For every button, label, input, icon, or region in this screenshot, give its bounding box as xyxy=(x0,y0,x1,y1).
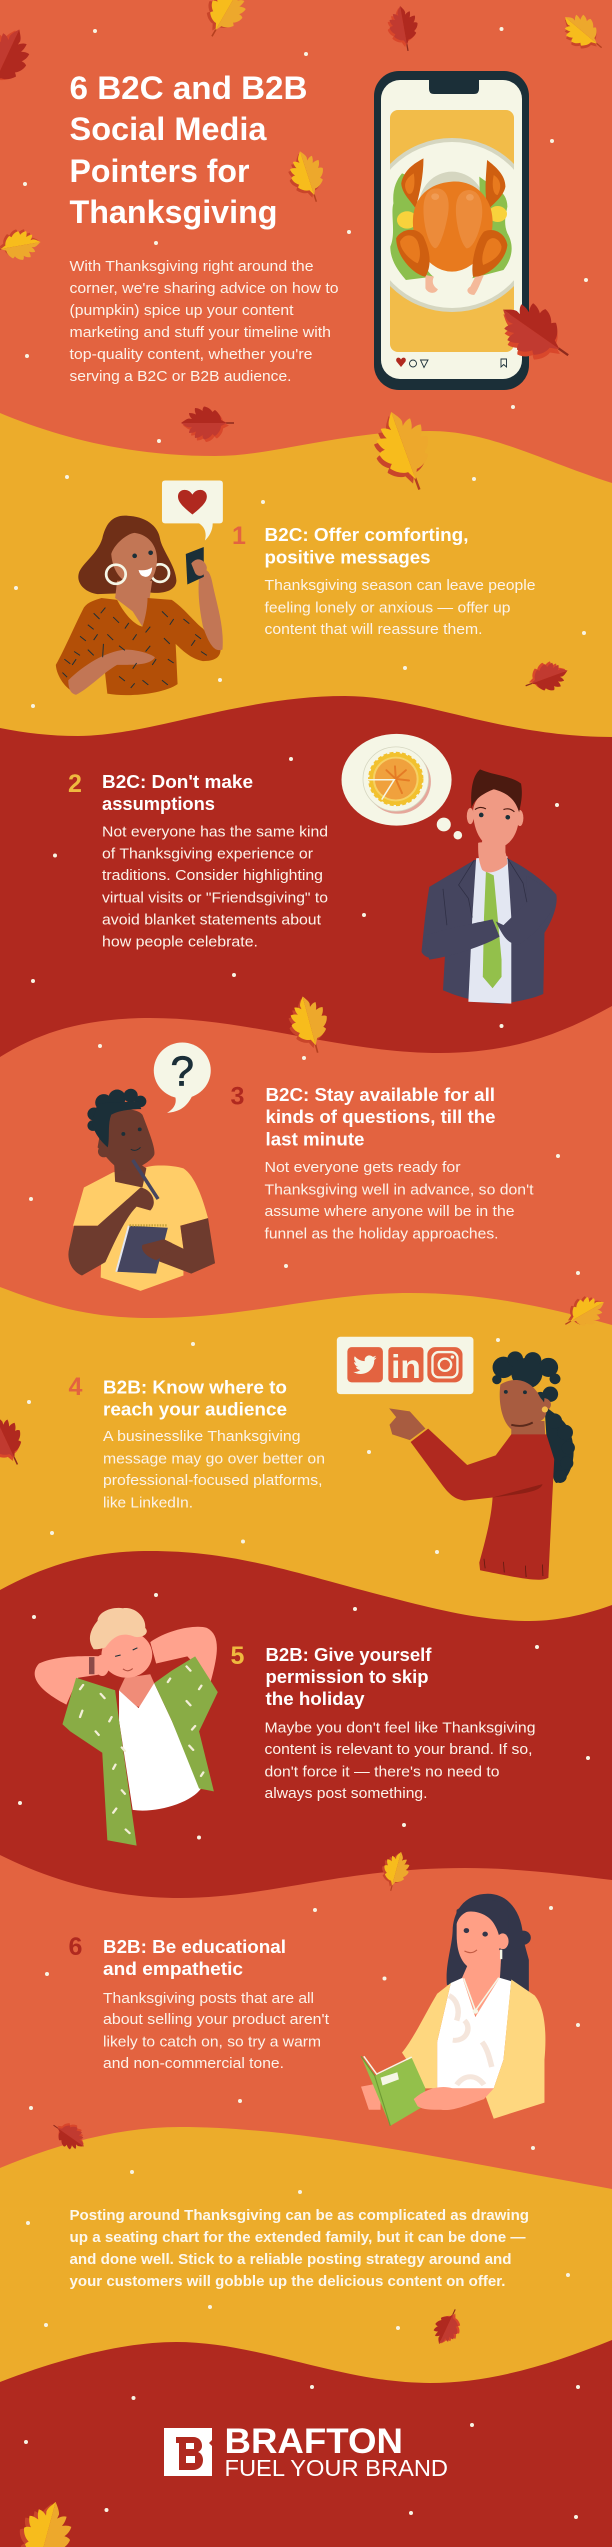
intro text: corner, we're sharing advice on how to xyxy=(70,280,338,297)
tip 4 heading: reach your audience xyxy=(103,1400,287,1420)
tip 3 heading: kinds of questions, till the xyxy=(266,1107,496,1127)
illustration: man thinking about pie xyxy=(342,734,557,1004)
illustration: man with notepad xyxy=(68,1042,215,1291)
title: 6 B2C and B2B xyxy=(70,70,308,106)
icon: leaf in closing panel xyxy=(428,2304,468,2350)
tip 2 body: virtual visits or "Friendsgiving" to xyxy=(102,890,328,907)
tip 4 body xyxy=(103,1428,325,1512)
icon: leaf at seventh wave xyxy=(47,2114,92,2156)
icon: linkedin: in xyxy=(391,1348,421,1386)
closing text: your customers will gobble up the delicious content on offer. xyxy=(70,2273,506,2290)
icon: leaf at sixth wave xyxy=(377,1848,413,1894)
tip 2 number: 2 xyxy=(68,770,82,798)
tip 4 body: A businesslike Thanksgiving xyxy=(103,1428,300,1445)
intro text xyxy=(70,258,338,385)
closing text xyxy=(70,2207,529,2290)
logo: Brafton xyxy=(164,2422,448,2481)
closing text: up a seating chart for the extended family, but it can be done — xyxy=(70,2229,526,2246)
tip 6 number: 6 xyxy=(68,1933,82,1961)
tip 5 number: 5 xyxy=(230,1642,244,1670)
icon: logo mark xyxy=(164,2428,212,2476)
icon: leaf right of tip 1 xyxy=(520,656,572,699)
tip 2 body: avoid blanket statements about xyxy=(102,911,322,928)
tip 1 body: feeling lonely or anxious — offer up xyxy=(264,600,510,616)
panel: tip 5 wave xyxy=(0,1551,612,2547)
icon: leaf left of tip 4 xyxy=(0,1409,32,1472)
tip 3 heading: B2C: Stay available for all xyxy=(266,1085,495,1105)
title xyxy=(70,70,308,230)
icon: leaf left edge xyxy=(0,226,43,264)
tip 5 heading: permission to skip xyxy=(266,1667,428,1687)
icon: leaf bottom left xyxy=(10,2495,79,2547)
illustration: relaxed man in green shirt xyxy=(35,1608,218,1846)
icon: leaf at fourth wave xyxy=(557,1288,611,1336)
tip 4 body: like LinkedIn. xyxy=(103,1494,193,1512)
tip 6 heading xyxy=(103,1937,286,1979)
tip 4 number: 4 xyxy=(68,1373,82,1401)
tip 2 heading: B2C: Don't make xyxy=(102,772,253,792)
speech bubble with heart xyxy=(162,480,223,541)
tip 3 number: 3 xyxy=(230,1082,244,1110)
logo: Brafton: FUEL YOUR BRAND xyxy=(224,2455,448,2481)
icon: leaf beside title xyxy=(282,146,332,208)
tip 2 heading xyxy=(102,772,253,814)
intro text: With Thanksgiving right around the xyxy=(70,258,314,275)
intro text: top-quality content, whether you're xyxy=(70,346,312,363)
tip 4 body: message may go over better on xyxy=(103,1450,325,1467)
tip 5 body xyxy=(264,1720,536,1802)
panel: tip 6 wave xyxy=(0,1855,612,2547)
tip 1 heading: positive messages xyxy=(264,548,430,568)
intro text: serving a B2C or B2B audience. xyxy=(70,368,292,385)
panel: tip 3 wave xyxy=(0,1006,612,2547)
tip 5 heading xyxy=(266,1645,433,1709)
tip 5 body: don't force it — there's no need to xyxy=(264,1763,500,1780)
phone illustration with turkey xyxy=(374,71,529,390)
tip 3 heading xyxy=(266,1085,496,1149)
tip 3 body: assume where anyone will be in the xyxy=(264,1203,514,1220)
illustration: woman pointing at social icons xyxy=(337,1337,575,1580)
closing text: and done well. Stick to a reliable posting strategy around and xyxy=(70,2251,512,2268)
intro text: marketing and stuff your timeline with xyxy=(70,324,331,341)
tip 5 body: always post something. xyxy=(264,1785,428,1802)
tip 5 heading: the holiday xyxy=(266,1689,364,1709)
tip 5 body: Maybe you don't feel like Thanksgiving xyxy=(264,1720,536,1736)
panel: closing wave xyxy=(0,2127,612,2547)
logo: Brafton: BRAFTON xyxy=(224,2422,403,2461)
tip 1 body xyxy=(264,577,536,638)
tip 1 heading xyxy=(264,525,468,568)
speech bubble with question mark: ? xyxy=(171,1048,194,1095)
tip 3 body: funnel as the holiday approaches. xyxy=(264,1225,498,1242)
thought bubble with pie xyxy=(342,734,462,839)
book xyxy=(361,2056,425,2126)
tip 2 body: of Thanksgiving experience or xyxy=(102,846,313,862)
illustration: woman with phone xyxy=(56,480,223,695)
tip 3 body xyxy=(264,1159,534,1242)
icon: leaf top middle right xyxy=(384,4,422,54)
tip 2 body: traditions. Consider highlighting xyxy=(102,867,323,884)
social media card xyxy=(337,1337,473,1394)
tip 2 body xyxy=(102,823,328,951)
icon: leaf top right xyxy=(554,6,611,61)
panel: tip 2 wave xyxy=(0,696,612,2547)
tip 5 body: content is relevant to your brand. If so, xyxy=(264,1741,532,1758)
closing text: Posting around Thanksgiving can be as complicated as drawing xyxy=(70,2207,529,2224)
tip 3 body: Not everyone gets ready for xyxy=(264,1159,460,1176)
tip 1 number: 1 xyxy=(232,522,246,550)
tip 1 body: Thanksgiving season can leave people xyxy=(264,577,536,594)
title: Social Media xyxy=(70,111,267,147)
icon: leaf top centre xyxy=(195,0,254,45)
icon: twitter xyxy=(347,1347,383,1382)
panel: footer wave xyxy=(0,2340,612,2547)
tip 6 body: and non-commercial tone. xyxy=(103,2055,284,2072)
illustration: woman reading book xyxy=(361,1894,545,2126)
tip 5 heading: B2B: Give yourself xyxy=(266,1645,433,1665)
tip 6 heading: B2B: Be educational xyxy=(103,1937,286,1957)
icon: leaf over phone xyxy=(487,289,582,379)
speech bubble with question mark xyxy=(154,1042,211,1113)
panel: tip 4 wave xyxy=(0,1287,612,2547)
title: Pointers for xyxy=(70,153,250,189)
tip 1 heading: B2C: Offer comforting, xyxy=(264,525,468,545)
intro text: (pumpkin) spice up your content xyxy=(70,302,294,319)
tip 6 heading: and empathetic xyxy=(103,1959,243,1979)
tip 4 heading xyxy=(103,1377,287,1420)
tip 3 body: Thanksgiving well in advance, so don't xyxy=(264,1181,534,1198)
title: Thanksgiving xyxy=(70,194,278,230)
icon: leaf at first wave xyxy=(181,406,234,442)
tip 6 body: Thanksgiving posts that are all xyxy=(103,1990,314,2007)
tip 6 body: likely to catch on, so try a warm xyxy=(103,2033,321,2050)
tip 2 heading: assumptions xyxy=(102,794,215,814)
tip 6 body xyxy=(103,1990,330,2072)
tip 2 body: Not everyone has the same kind xyxy=(102,823,328,840)
icon: leaf at third wave xyxy=(282,992,335,1058)
tip 1 body: content that will reassure them. xyxy=(264,621,482,638)
tip 4 body: professional-focused platforms, xyxy=(103,1472,322,1489)
icon: instagram xyxy=(427,1347,463,1382)
icon: leaf top left xyxy=(0,19,39,101)
tip 4 heading: B2B: Know where to xyxy=(103,1377,287,1397)
icon: large leaf at first wave xyxy=(363,403,444,500)
tip 3 heading: last minute xyxy=(266,1129,364,1149)
tip 2 body: how people celebrate. xyxy=(102,934,258,951)
tip 6 body: about selling your product aren't xyxy=(103,2011,330,2028)
